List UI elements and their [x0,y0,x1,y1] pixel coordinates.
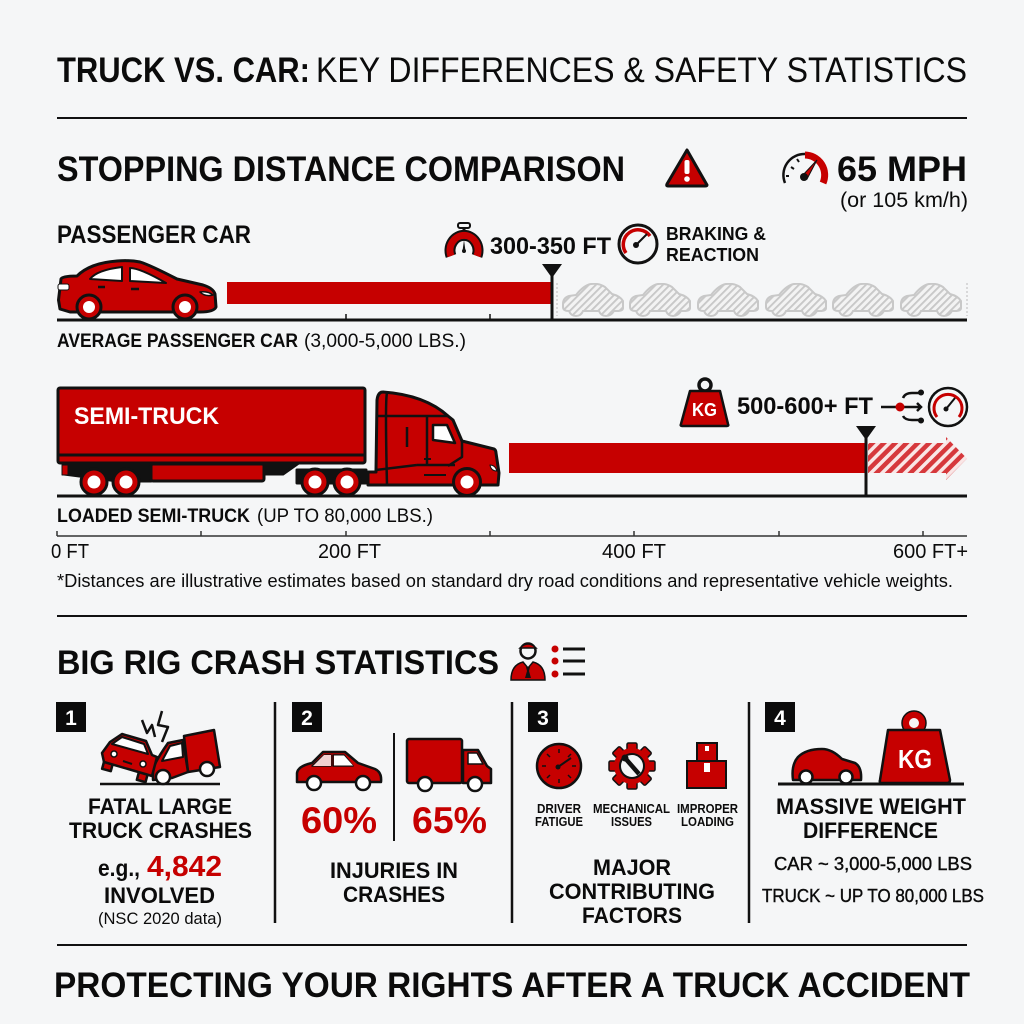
stat label: injuries in crashes: CRASHES [343,882,445,907]
title: TRUCK VS. CAR: [57,51,310,90]
label: driver fatigue: DRIVER [537,802,581,816]
stat title: major contributing factors: CONTRIBUTING [549,879,715,904]
stat title: massive weight difference: MASSIVE WEIGHT [776,794,967,819]
footer banner: PROTECTING YOUR RIGHTS AFTER A TRUCK ACCIDENT [54,966,970,1005]
label: driver fatigue: FATIGUE [535,815,583,829]
marker: car stop point [542,264,562,320]
heading: big rig crash statistics: BIG RIG CRASH STATISTICS [57,644,499,682]
badge: number 4 [765,702,795,732]
panel: stat 2 injuries [292,702,491,907]
label: braking and reaction [666,223,766,265]
distance scale: 600 FT+ [893,541,968,563]
icon: stopwatch [450,223,478,256]
icon: car and truck collision [100,711,220,784]
panel: big rig crash statistics [56,644,984,928]
label: improper loading: IMPROPER [677,802,738,816]
marker: truck stop point [856,426,876,496]
badge: number 1: 1 [65,707,77,730]
car weight: CAR ~ 3,000-5,000 LBS [774,853,972,874]
stat title: major contributing factors: FACTORS [582,903,682,928]
caption: average passenger car: AVERAGE PASSENGER CAR [57,331,298,352]
title [57,51,967,90]
stat label: involved: INVOLVED [104,883,215,908]
truck distance label: 500-600+ FT [737,393,873,420]
ghost cars: equivalent car lengths [563,284,961,316]
icon: red passenger car [58,261,216,319]
icon: truck gauge [929,388,967,426]
stat label: injuries in crashes: INJURIES IN [330,858,458,883]
label: braking and reaction: REACTION [666,244,759,265]
panel: stopping distance comparison [51,150,968,591]
stat title: major contributing factors [549,855,715,928]
stat label: injuries in crashes [330,858,458,907]
badge: number 3: 3 [537,707,549,730]
stat title: massive weight difference [776,794,967,843]
stat title [69,794,252,843]
panel: stat 4 weight difference [762,702,984,906]
icon: fatigue gauge [537,744,581,788]
arrow: extended truck distance [868,437,967,480]
label: improper loading [677,802,738,829]
badge: number 3 [528,702,558,732]
icon: person with checklist [511,644,585,680]
caption: loaded semi-truck: LOADED SEMI-TRUCK [57,506,250,527]
stat value: 4,842: 4,842 [147,851,222,883]
caption: average passenger car: (3,000-5,000 LBS.) [304,331,466,352]
caption: loaded semi-truck: (UP TO 80,000 LBS.) [257,506,433,527]
label: passenger car: PASSENGER CAR [57,221,251,249]
stat value: 60%: 60% [301,800,377,841]
icon: mechanical gear [609,743,655,789]
distance scale [51,531,968,563]
icon: stacked boxes [687,743,726,788]
stat title: TRUCK CRASHES [69,818,252,843]
label: braking and reaction: BRAKING & [666,223,766,244]
icon: truck [407,739,491,791]
stat value: 65%: 65% [412,800,487,841]
icon: kg weight [681,379,728,426]
speed label [837,150,968,212]
stat title: FATAL LARGE [88,794,232,819]
icon: kg weight: KG [692,400,717,420]
label: mechanical issues: MECHANICAL [593,802,670,816]
label: driver fatigue [535,802,583,829]
distance scale: 0 FT [51,541,89,563]
icon: speedometer [783,154,825,183]
icon: reaction flow [881,391,923,422]
panel: stat 1 fatal crashes [56,702,252,928]
heading: stopping distance comparison: STOPPING DISTANCE COMPARISON [57,150,625,189]
panel: stat 3 contributing factors [528,702,738,928]
speed label: (or 105 km/h) [840,189,968,212]
icon: semi-truck [58,388,499,496]
speed label: 65 MPH [837,150,967,189]
label: semi-truck: SEMI-TRUCK [74,403,220,430]
icon: car [297,752,381,790]
car distance label: 300-350 FT [490,233,611,260]
stat title: massive weight difference: DIFFERENCE [803,818,938,843]
stat title: major contributing factors: MAJOR [593,855,671,880]
label: mechanical issues [593,802,670,829]
badge: number 2 [292,702,322,732]
footnote: *Distances are illustrative estimates based on standard dry road conditions and representative vehicle weights. [57,571,953,591]
truck weight: TRUCK ~ UP TO 80,000 LBS [762,885,984,906]
caption: average passenger car [57,331,466,352]
caption: loaded semi-truck [57,506,433,527]
bar: car stopping distance [227,282,552,304]
badge: number 1 [56,702,86,732]
icon: small car [793,749,861,784]
bar: truck stopping distance [509,443,866,473]
title: KEY DIFFERENCES & SAFETY STATISTICS [316,51,967,90]
badge: number 4: 4 [774,707,786,730]
source note: (NSC 2020 data) [98,909,222,928]
label: improper loading: LOADING [681,815,734,829]
icon: kg weight large [880,711,950,783]
distance scale: 200 FT [318,541,381,563]
stat value: 4,842: e.g., [98,855,140,881]
badge: number 2: 2 [301,707,313,730]
icon: warning triangle [667,150,707,186]
distance scale: 400 FT [602,541,666,563]
icon: braking gauge [619,225,657,263]
icon: kg weight large: KG [898,744,932,774]
stat value: 4,842 [98,851,222,883]
label: mechanical issues: ISSUES [611,815,652,829]
